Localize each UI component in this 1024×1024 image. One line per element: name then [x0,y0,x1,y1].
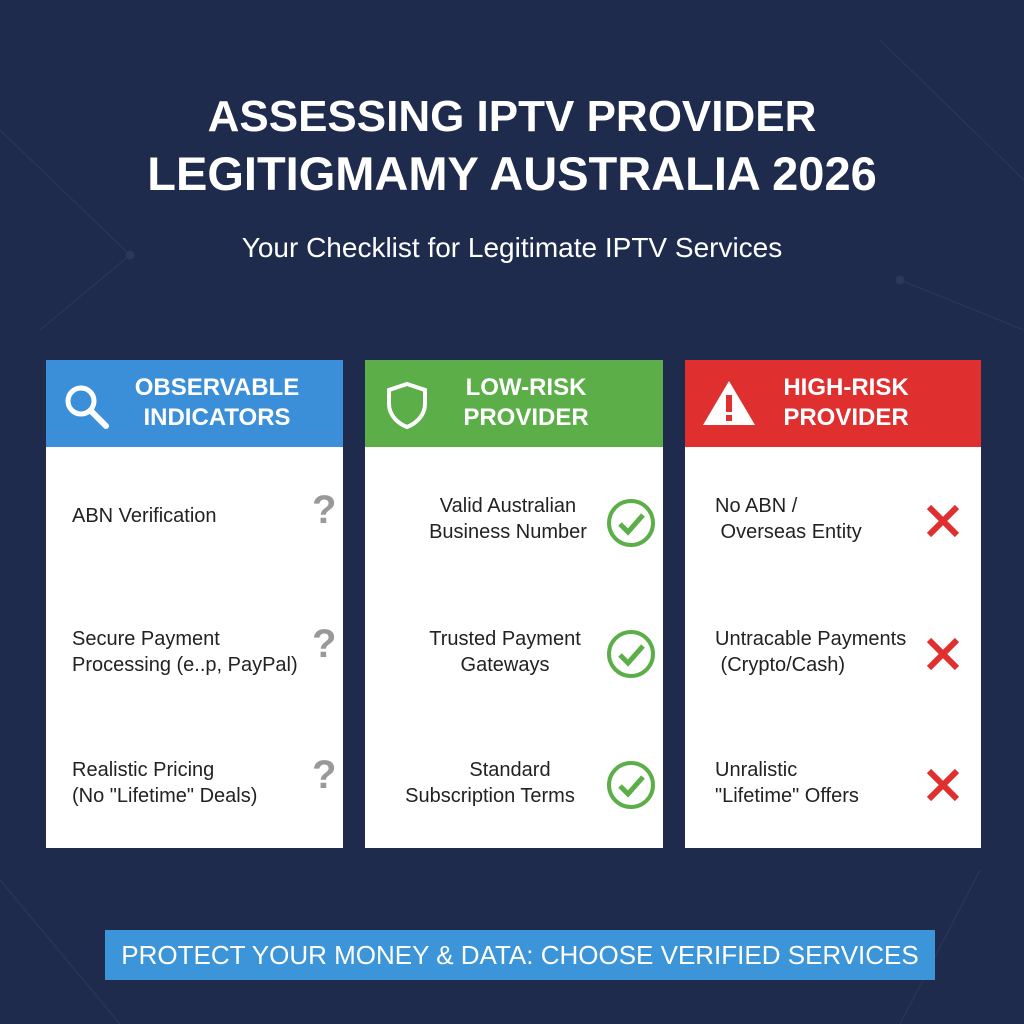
banner [105,930,935,980]
banner: PROTECT YOUR MONEY & DATA: CHOOSE VERIFIED SERVICES [121,940,919,970]
panel: low-risk [365,360,663,848]
icon: check [607,499,655,547]
panel: high-risk: Untracable Payments [715,628,906,650]
row: valid ABN: Valid Australian [440,495,576,517]
panel: observable indicators: ABN Verification [72,505,217,527]
icon: shield [387,382,427,430]
icon: cross [926,638,960,670]
panel: high-risk: Overseas Entity [721,521,862,543]
header: low-risk: PROVIDER [463,404,589,431]
header: high-risk: HIGH-RISK [783,374,909,401]
header: high-risk: PROVIDER [783,404,909,431]
header: high-risk [685,360,981,447]
icon: magnifier [66,386,109,429]
panel: observable indicators: ? [312,488,336,532]
row: payment [72,622,336,676]
panel: high-risk: (Crypto/Cash) [721,654,845,676]
title [147,92,877,200]
row: no ABN [715,495,862,543]
row: trusted gateways: Trusted Payment [429,628,581,650]
panel: observable indicators: ? [312,753,336,797]
panel: high-risk: No ABN / [715,495,797,517]
panel: observable indicators: Secure Payment [72,628,220,650]
icon: check [607,630,655,678]
row: lifetime [715,759,859,807]
row: standard terms: Subscription Terms [405,785,575,807]
row: valid ABN: Business Number [429,521,587,543]
panel: observable indicators: Realistic Pricing [72,759,214,781]
header: observable: INDICATORS [143,404,291,431]
row: trusted gateways [429,628,581,676]
header: low-risk [365,360,663,447]
header: low-risk: LOW-RISK [466,374,586,401]
row: untraceable [715,628,906,676]
row: trusted gateways: Gateways [461,654,549,676]
row: standard terms: Standard [469,759,551,781]
row: standard terms [405,759,575,807]
panel: high-risk [685,360,981,848]
icon: warning [703,381,755,425]
icon: cross [926,504,960,538]
title: ASSESSING IPTV PROVIDER [208,92,816,141]
panel: observable indicators: ? [312,622,336,666]
panel: high-risk: "Lifetime" Offers [715,785,859,807]
panel: observable indicators: (No "Lifetime" Deals) [72,785,257,807]
icon: check [607,761,655,809]
header: observable: OBSERVABLE [135,374,299,401]
title: LEGITIGMAMY AUSTRALIA 2026 [147,147,877,200]
row: valid ABN [429,495,587,543]
subtitle: Your Checklist for Legitimate IPTV Services [242,232,782,263]
panel: observable indicators: Processing (e..p, PayPal) [72,654,298,676]
icon: cross [926,768,960,802]
row: pricing [72,753,336,807]
panel: observable indicators [46,360,343,848]
row: ABN [72,488,336,532]
header: observable [46,360,343,447]
panel: high-risk: Unralistic [715,759,797,781]
